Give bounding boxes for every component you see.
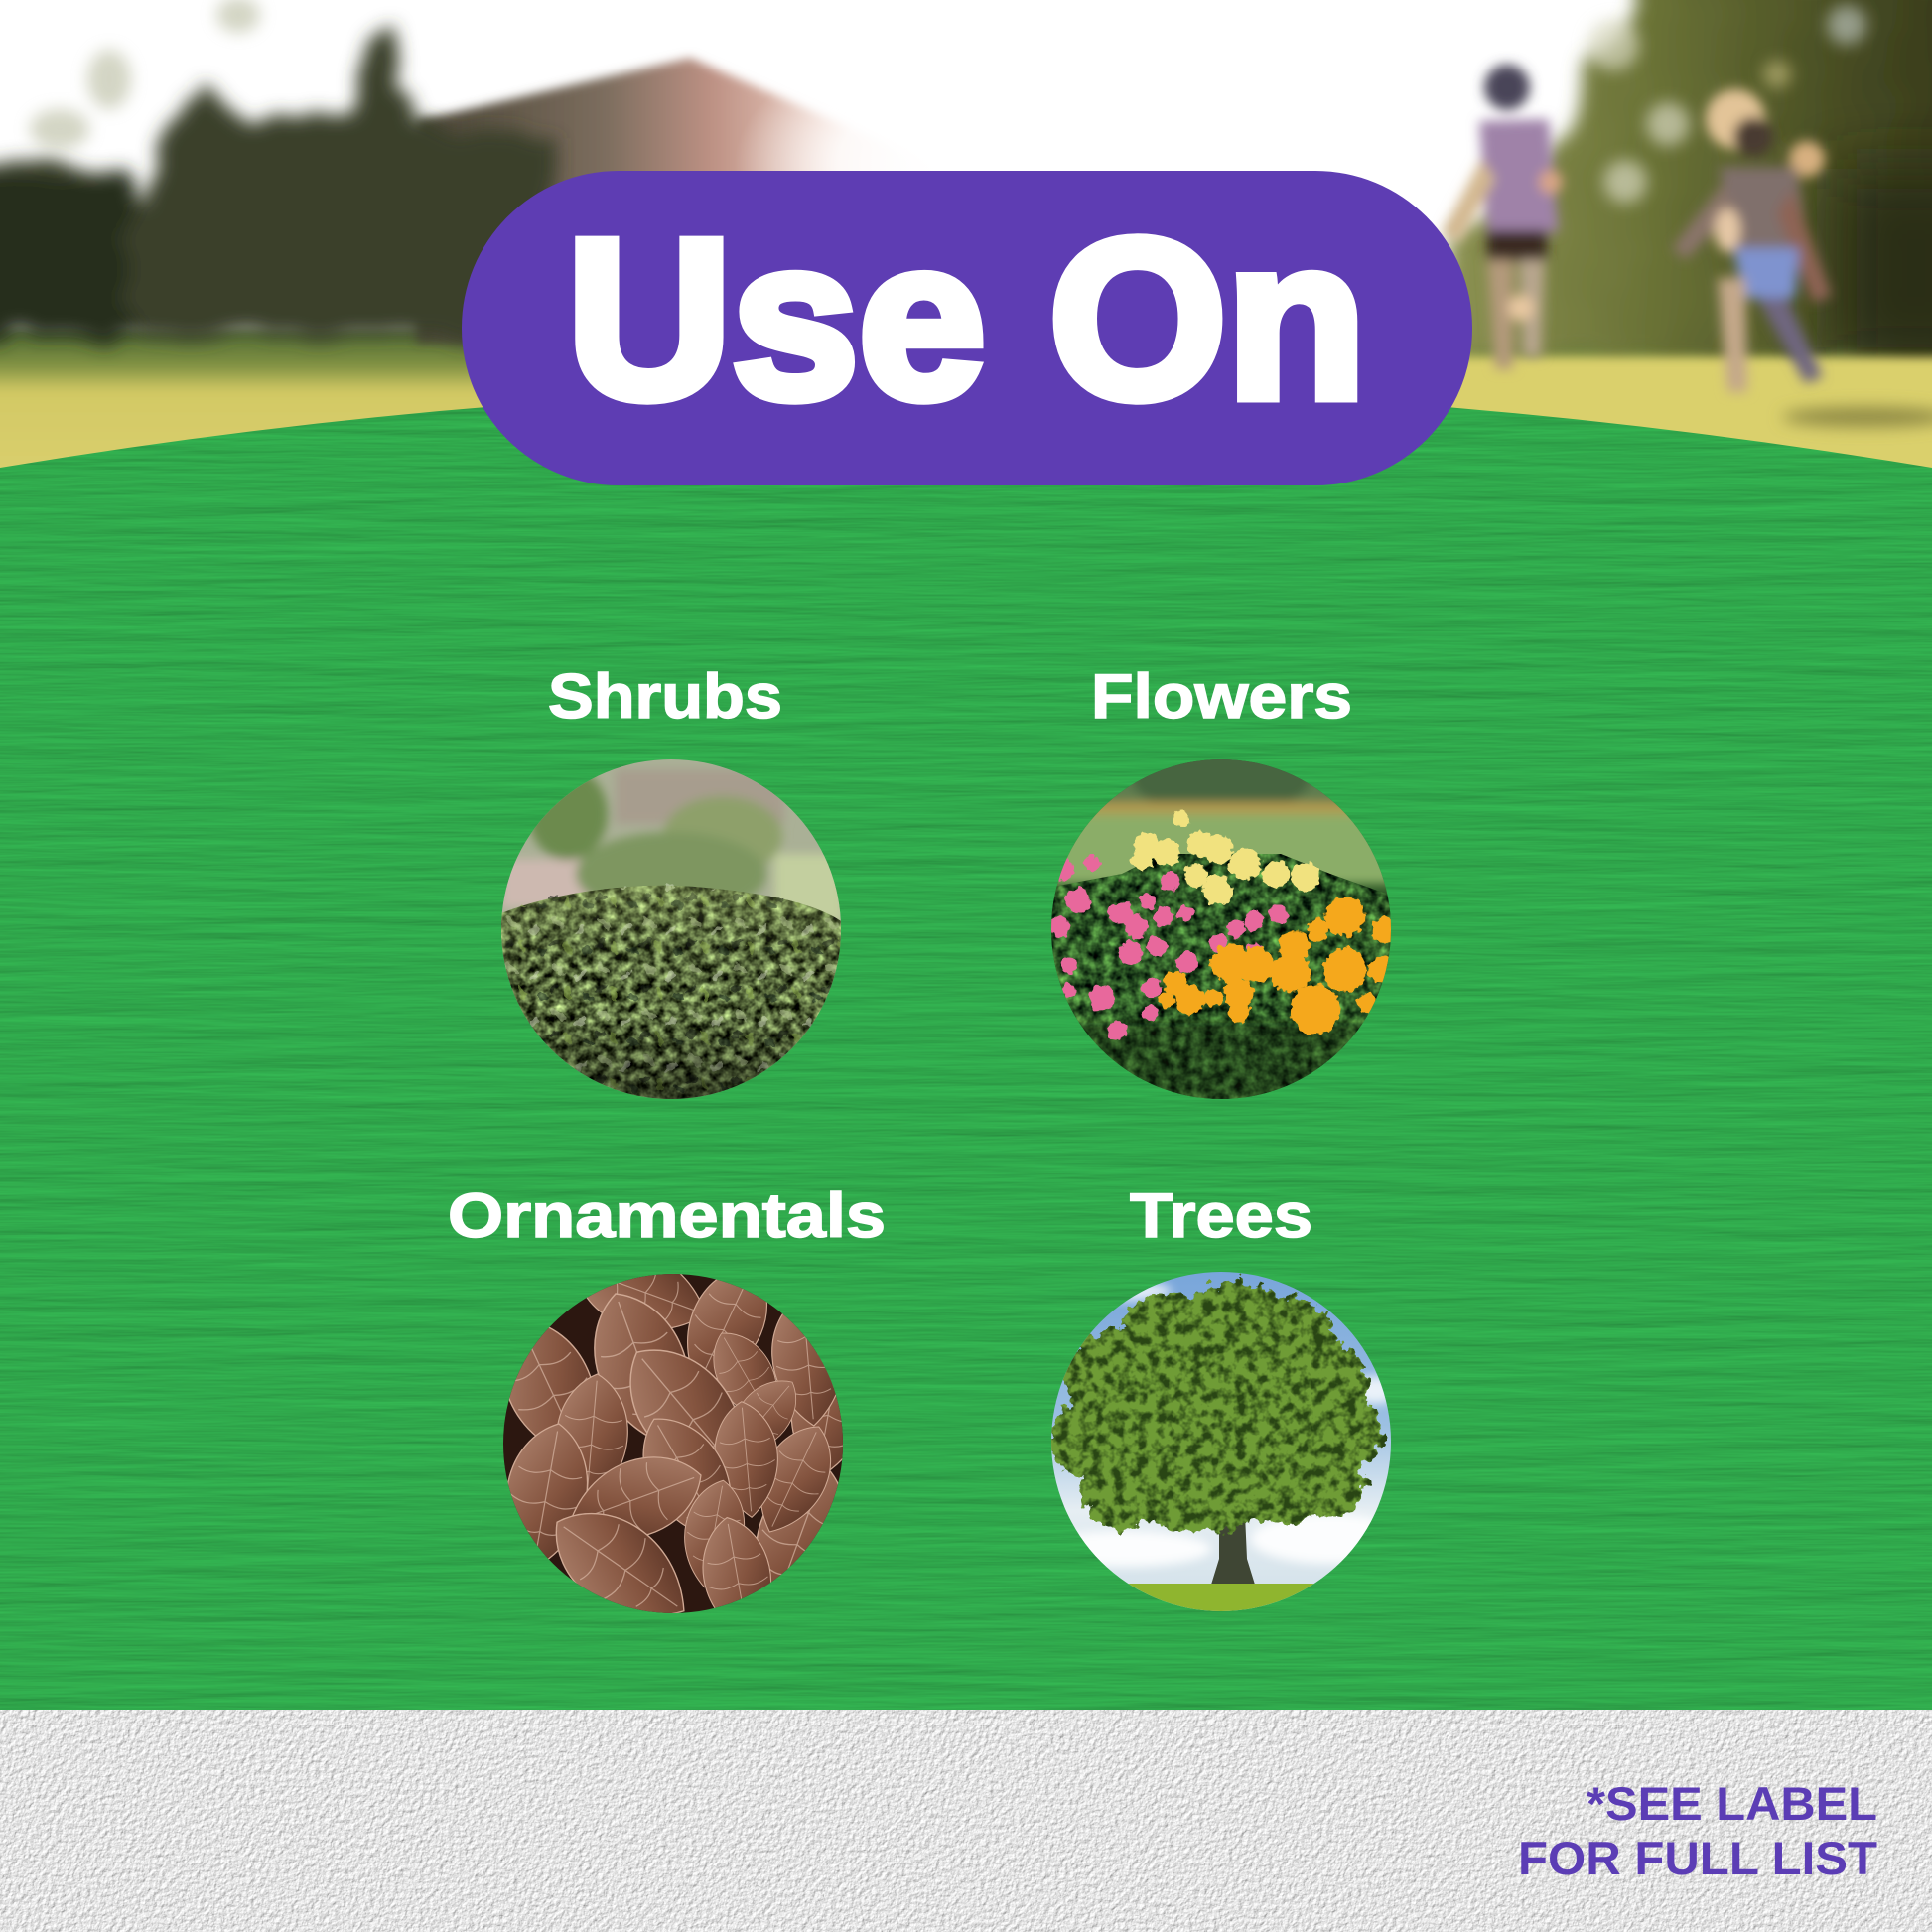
title pill [462,171,1472,485]
label: Ornamentals: Ornamentals [448,1181,886,1251]
footnote [1518,1777,1877,1884]
footnote line 2: FOR FULL LIST [1518,1832,1877,1884]
photo circle: trees [1051,1272,1391,1611]
panel: green textured field [0,387,1932,1710]
faint tree branches in sky [30,0,260,149]
grass [0,324,1900,468]
footnote line 1: *SEE LABEL [1587,1777,1877,1830]
blurred trees right [1430,0,1932,362]
grass base [1128,1584,1314,1611]
blurred trees left [0,30,566,338]
title text: Use On [567,194,1366,446]
tree crown [1050,1281,1382,1532]
panel: white stucco footer [0,1710,1932,1932]
sun glare [745,101,933,171]
label: Flowers: Flowers [1091,662,1352,732]
label: Shrubs: Shrubs [548,662,782,732]
background photo: family lawn [0,0,1932,496]
bokeh lights [1587,5,1866,204]
photo circle: flowers [1042,745,1400,1102]
photo circle: ornamentals [503,1274,843,1613]
photo circle: shrubs [501,759,844,1102]
child two running [1672,89,1832,392]
child one running [1442,65,1563,369]
blurred house [415,52,846,347]
trunk [1211,1523,1255,1584]
label: Trees: Trees [1130,1181,1312,1251]
